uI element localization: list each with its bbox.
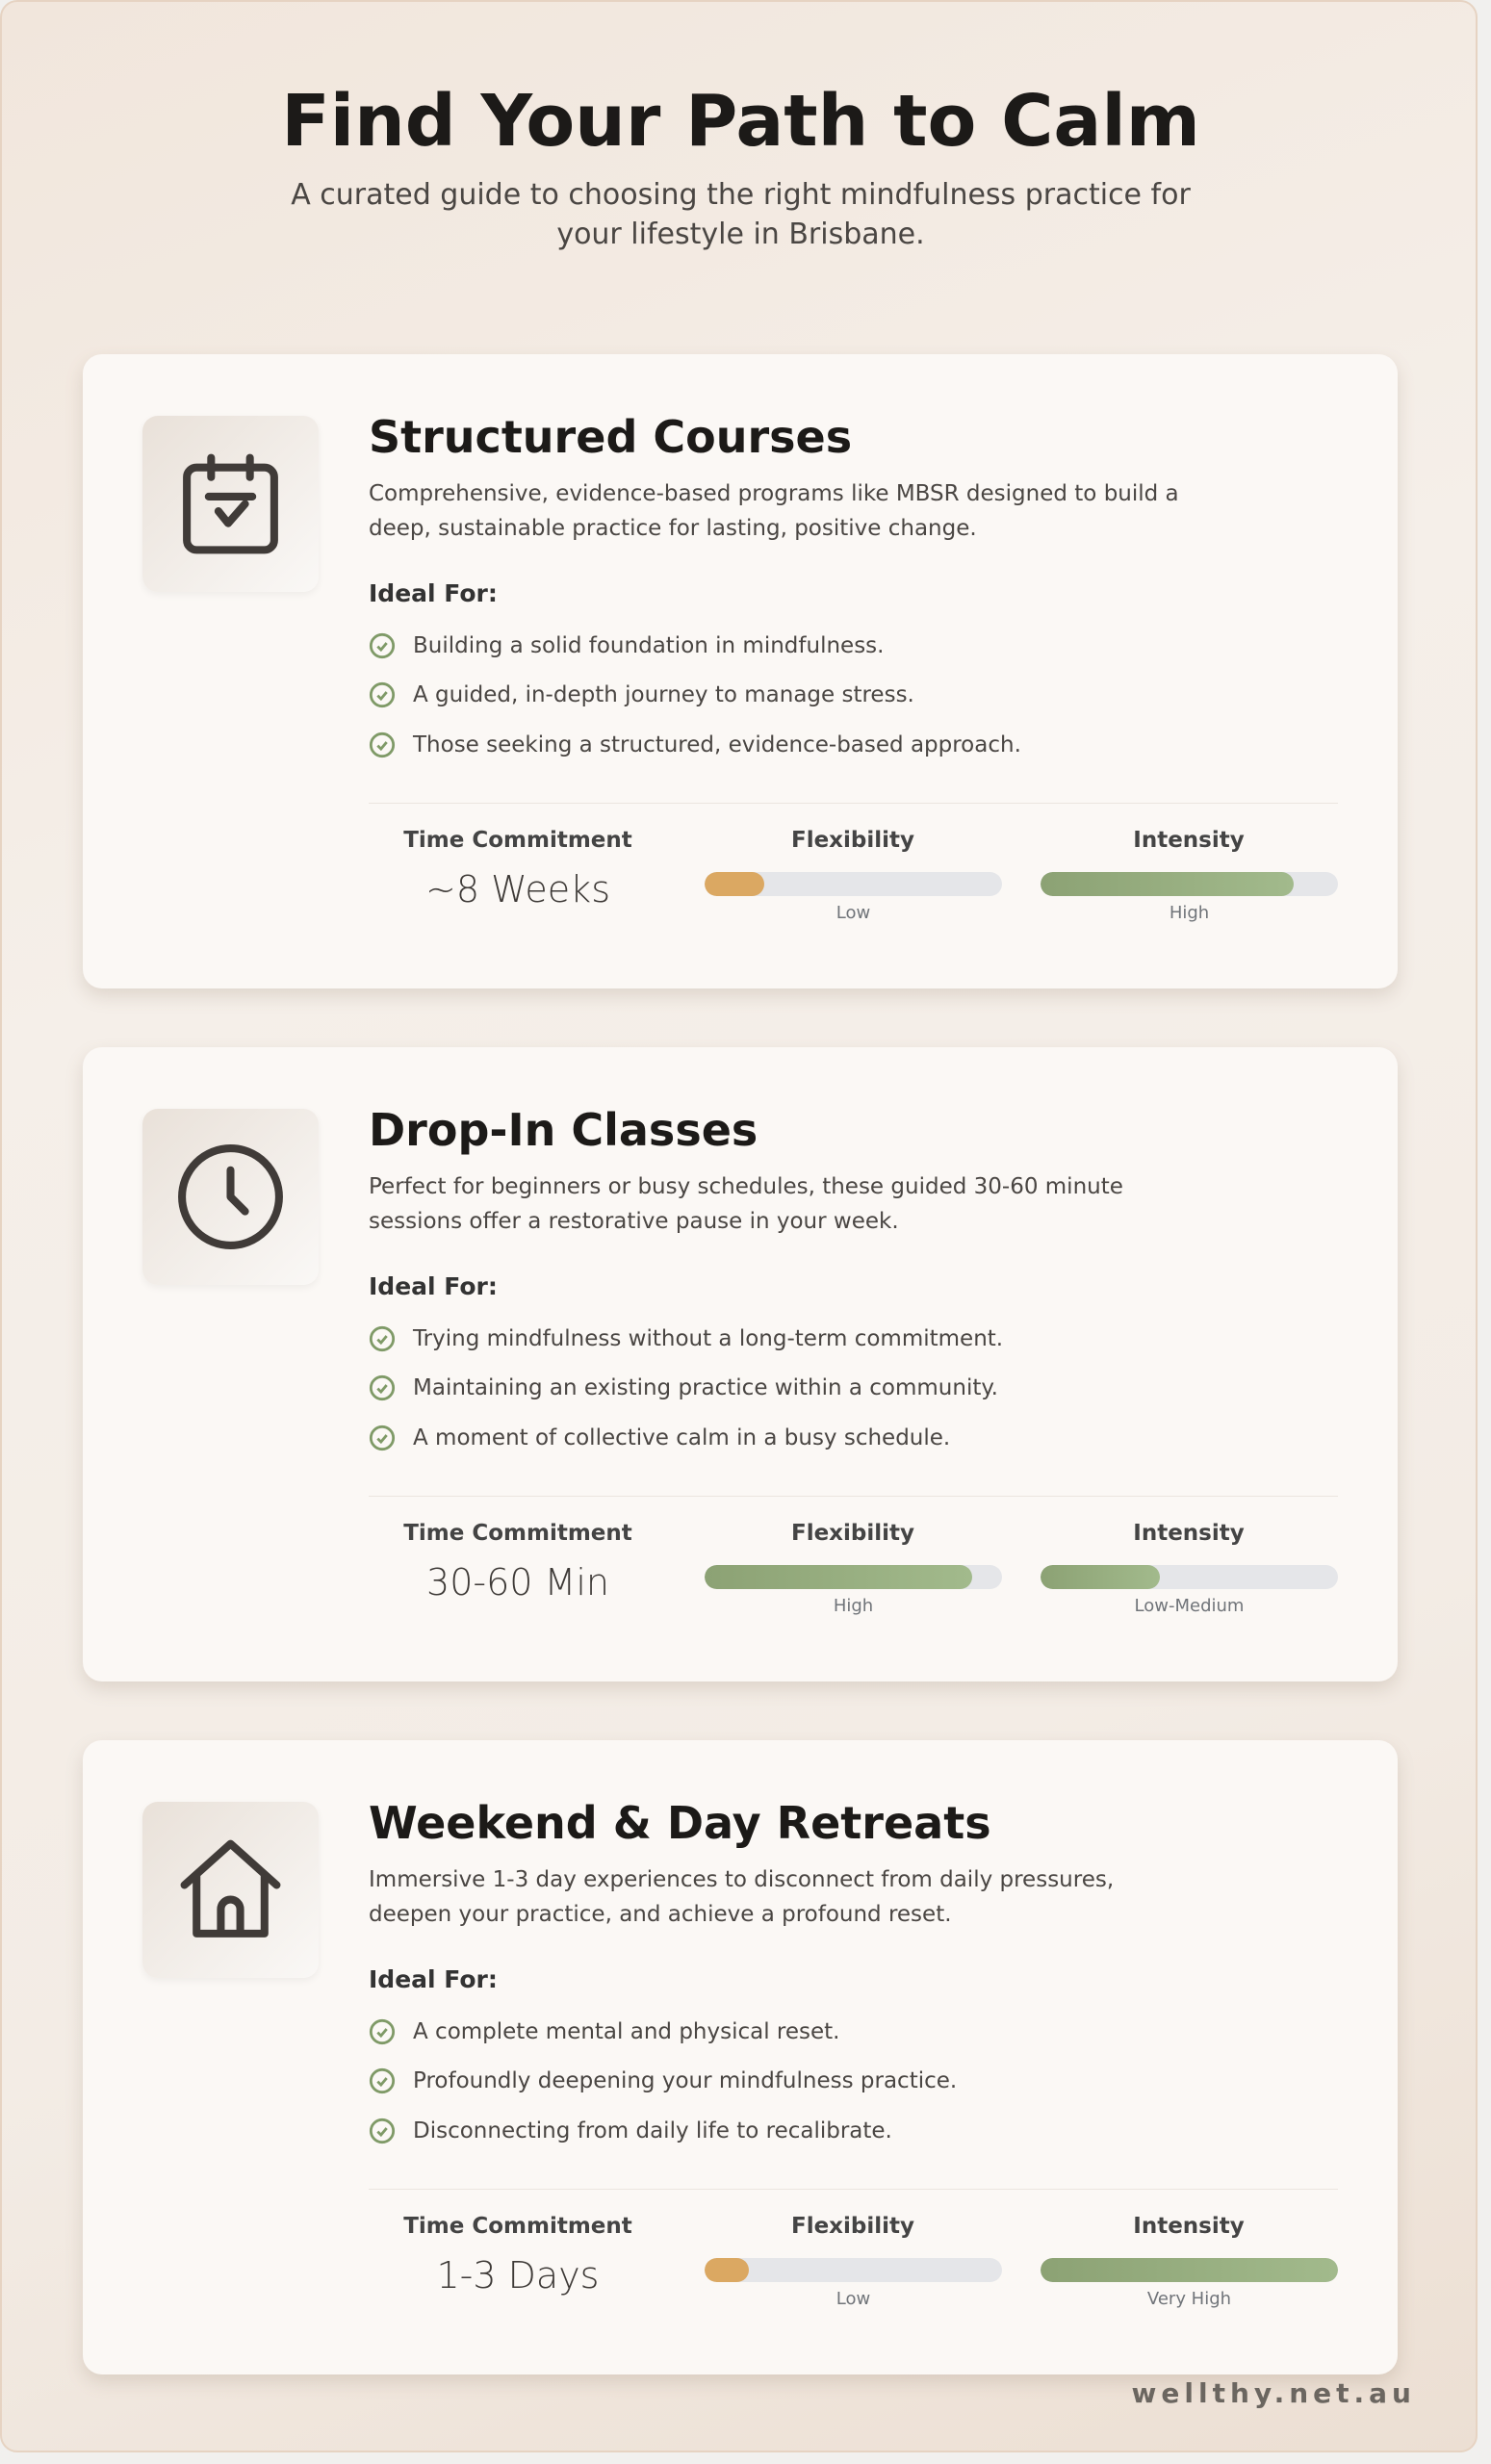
metric label: Flexibility [791, 828, 914, 853]
subtitle: A curated guide to choosing the right mindfulness practice for [291, 178, 1191, 212]
bar label: Low [836, 2289, 870, 2309]
icon: clock [142, 1109, 319, 1285]
panel: structured courses [83, 354, 1398, 988]
panel: retreats [83, 1740, 1398, 2374]
watermark: wellthy.net.au [1132, 2377, 1416, 2409]
ideal for heading: Ideal For: [369, 579, 498, 607]
bullet: Building a solid foundation in mindfulness. [413, 633, 884, 658]
description: Perfect for beginners or busy schedules, these guided 30-60 minute sessions offer a restorative pause in your week. [369, 1174, 1123, 1234]
bullet: Maintaining an existing practice within a community. [413, 1375, 998, 1400]
heading: Weekend & Day Retreats [369, 1797, 991, 1849]
bar: intensity [1041, 1565, 1338, 1589]
metric label: Time Commitment [403, 1521, 632, 1546]
bullet: Trying mindfulness without a long-term commitment. [413, 1326, 1003, 1351]
icon: calendar [142, 416, 319, 592]
time value: 30-60 Min [426, 1561, 609, 1604]
time value: ~8 Weeks [425, 868, 610, 911]
description: Immersive 1-3 day experiences to disconnect from daily pressures, deepen your practice, and achieve a profound reset. [369, 1867, 1114, 1927]
bar label: Low-Medium [1135, 1596, 1244, 1616]
heading: Structured Courses [369, 411, 852, 463]
subtitle: your lifestyle in Brisbane. [556, 218, 925, 251]
metric label: Time Commitment [403, 828, 632, 853]
bar: intensity [1041, 2258, 1338, 2282]
bullet: A complete mental and physical reset. [413, 2019, 839, 2044]
time value: 1-3 Days [437, 2254, 599, 2297]
metric label: Intensity [1133, 1521, 1245, 1546]
bullet: Disconnecting from daily life to recalibrate. [413, 2118, 892, 2143]
metric label: Flexibility [791, 1521, 914, 1546]
bar label: High [1170, 903, 1209, 923]
metric label: Flexibility [791, 2214, 914, 2239]
bar: flexibility [705, 1565, 1002, 1589]
subtitle [291, 178, 1191, 251]
bullet: Those seeking a structured, evidence-based approach. [413, 732, 1021, 757]
bullet: Profoundly deepening your mindfulness practice. [413, 2068, 957, 2093]
ideal for heading: Ideal For: [369, 1272, 498, 1300]
metric label: Intensity [1133, 2214, 1245, 2239]
bullet: A moment of collective calm in a busy schedule. [413, 1425, 950, 1450]
bar label: Very High [1147, 2289, 1231, 2309]
icon: house [142, 1802, 319, 1978]
heading: Drop-In Classes [369, 1104, 758, 1156]
metric label: Intensity [1133, 828, 1245, 853]
bar: flexibility [705, 2258, 1002, 2282]
bar: flexibility [705, 872, 1002, 896]
panel: drop-in classes [83, 1047, 1398, 1681]
bar label: Low [836, 903, 870, 923]
ideal for heading: Ideal For: [369, 1965, 498, 1993]
title: Find Your Path to Calm [281, 80, 1200, 163]
metric label: Time Commitment [403, 2214, 632, 2239]
bar label: High [834, 1596, 873, 1616]
bar: intensity [1041, 872, 1338, 896]
description: Comprehensive, evidence-based programs like MBSR designed to build a deep, sustainable practice for lasting, positive change. [369, 481, 1179, 541]
bullet: A guided, in-depth journey to manage stress. [413, 682, 914, 707]
